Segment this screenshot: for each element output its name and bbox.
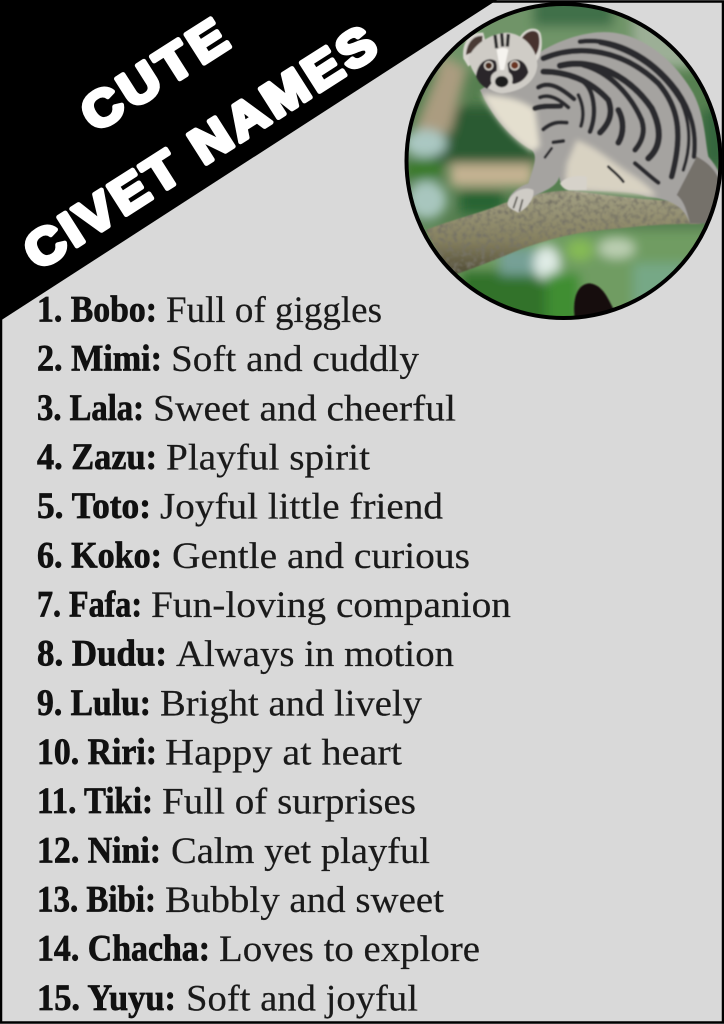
- white chest: [482, 93, 540, 152]
- name 13: [37, 880, 445, 921]
- civet body: [480, 32, 721, 223]
- names list: [37, 290, 511, 1019]
- name 6: Gentle and curious: [172, 536, 470, 577]
- name 1: 1. Bobo:: [37, 290, 157, 330]
- name 9: Bright and lively: [160, 683, 423, 724]
- name 14: [37, 929, 480, 970]
- name 13: Bubbly and sweet: [165, 880, 445, 921]
- name 15: [37, 978, 418, 1019]
- muzzle and nose: [490, 70, 514, 84]
- name 8: Always in motion: [176, 634, 454, 675]
- name 2: 2. Mimi:: [37, 339, 162, 380]
- name 7: 7. Fafa:: [37, 584, 142, 626]
- name 9: 9. Lulu:: [37, 683, 151, 724]
- name 14: 14. Chacha:: [37, 929, 210, 970]
- name 11: [37, 781, 416, 823]
- name 1: [37, 290, 382, 331]
- title line: civet names: CIVET NAMES: [14, 16, 387, 281]
- dark mask: [476, 59, 497, 89]
- dark stripes: [535, 41, 695, 183]
- name 9: [37, 683, 423, 724]
- name 15: Soft and joyful: [186, 978, 418, 1019]
- name 8: [37, 634, 454, 675]
- name 6: [37, 535, 470, 577]
- name 14: Loves to explore: [219, 929, 480, 970]
- name 3: [37, 388, 456, 429]
- name 13: 13. Bibi:: [37, 880, 156, 920]
- black corner banner: [0, 0, 497, 321]
- name 1: Full of giggles: [166, 290, 382, 331]
- circular civet photo: [404, 2, 722, 320]
- eyes: [484, 61, 493, 70]
- tail tone: [677, 157, 721, 223]
- pale belly: [565, 140, 657, 197]
- title: [14, 9, 387, 281]
- name 5: [37, 486, 444, 528]
- name 10: Happy at heart: [165, 732, 403, 774]
- name 11: Full of surprises: [162, 782, 416, 823]
- name 5: Joyful little friend: [160, 487, 444, 528]
- name 12: [37, 830, 430, 872]
- name 4: 4. Zazu:: [37, 437, 157, 478]
- tree branch: [426, 191, 700, 274]
- paws: [507, 189, 534, 213]
- name 12: 12. Nini:: [37, 830, 161, 871]
- ears: [463, 33, 487, 67]
- civet head: [463, 29, 542, 93]
- name 4: [37, 437, 371, 478]
- name 5: 5. Toto:: [37, 486, 151, 527]
- name 10: [37, 732, 403, 774]
- name 2: [37, 339, 420, 380]
- photo ring: [406, 4, 720, 318]
- name 2: Soft and cuddly: [171, 339, 420, 380]
- name 3: Sweet and cheerful: [153, 388, 456, 429]
- name 15: 15. Yuyu:: [37, 978, 176, 1019]
- title line: cute: CUTE: [71, 9, 238, 143]
- name 11: 11. Tiki:: [37, 781, 153, 822]
- black tail tip at bottom: [574, 283, 613, 320]
- name 3: 3. Lala:: [37, 388, 144, 429]
- face: [468, 33, 537, 93]
- name 8: 8. Dudu:: [37, 634, 167, 675]
- name 12: Calm yet playful: [171, 831, 430, 872]
- name 6: 6. Koko:: [37, 535, 162, 576]
- name 10: 10. Riri:: [37, 732, 157, 773]
- photo background foliage: [408, 6, 718, 316]
- name 4: Playful spirit: [166, 438, 371, 478]
- name 7: Fun-loving companion: [151, 585, 511, 626]
